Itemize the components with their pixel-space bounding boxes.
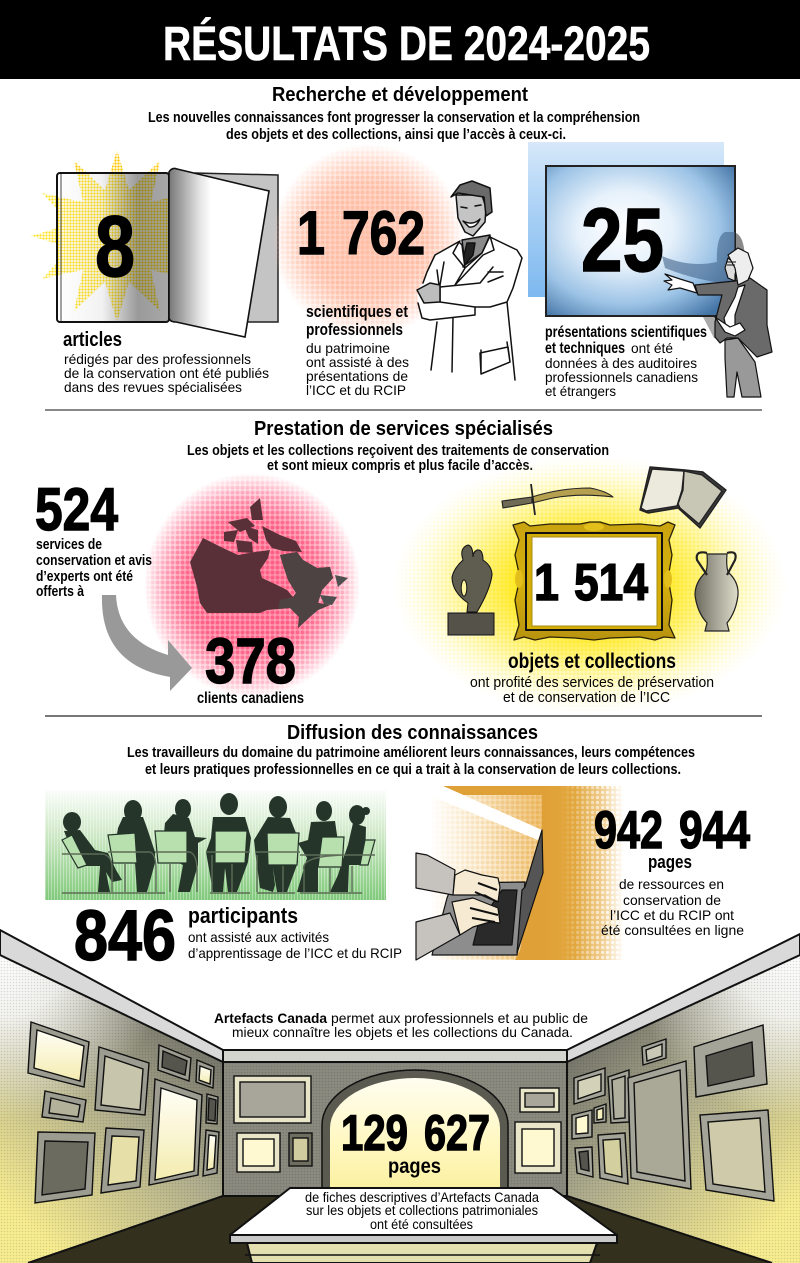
orange light background [428, 786, 626, 960]
title banner: RÉSULTATS DE 2024-2025 [163, 17, 650, 71]
label: scientifiques: l’ICC et du RCIP [306, 382, 406, 398]
icon: old book [640, 467, 726, 528]
label: pages en ligne: conservation de [623, 892, 721, 908]
gallery caption: Artefacts Canada [214, 1010, 588, 1040]
label: présentations: ont été [631, 340, 673, 356]
number: 129 627: 129 [341, 1105, 408, 1161]
label: articles: de la conservation ont été publiés [64, 365, 269, 381]
number: 1 514: 1 [534, 554, 559, 612]
label: présentations: présentations scientifiques [545, 324, 707, 341]
left wall [0, 930, 223, 1263]
map of Canada [190, 498, 348, 628]
number: 1 762 [297, 199, 425, 267]
intro text: prestation [187, 443, 609, 474]
number: 129 627 [341, 1105, 490, 1161]
green meeting panel [45, 790, 386, 900]
icon: sculpture [448, 545, 494, 635]
label: articles: articles [63, 329, 122, 351]
label: objets et collections: et de conservation de l’ICC [503, 690, 670, 706]
gallery caption: Artefacts Canada: Artefacts Canada [214, 1010, 327, 1026]
intro text: diffusion: Les travailleurs du domaine du patrimoine améliorent leurs connaissances, leurs compétences [127, 745, 695, 761]
right wall [567, 934, 800, 1263]
label: pages en ligne: l’ICC et du RCIP ont [610, 907, 734, 923]
icon: presenter [664, 248, 772, 397]
section: diffusion des connaissances [45, 722, 750, 976]
back wall [223, 1050, 567, 1196]
label: pages en ligne: pages [648, 852, 692, 872]
number: 942 944 [594, 801, 750, 860]
label: participants: ont assisté aux activités [188, 929, 329, 945]
laptop computer [432, 830, 543, 955]
paintings: back wall [234, 1076, 561, 1173]
label: scientifiques: présentations de [306, 368, 408, 384]
number: 524: 524 [35, 476, 119, 543]
number: 942 944: 944 [679, 801, 750, 860]
label: participants: participants [188, 903, 298, 928]
peach halftone glow [276, 146, 462, 334]
title banner [0, 0, 800, 79]
label: objets et collections: ont profité des services de préservation [470, 675, 714, 691]
number: 378: 378 [205, 625, 296, 697]
label: clients canadiens: clients canadiens [197, 690, 304, 707]
projection screen [528, 142, 745, 340]
label: articles [63, 329, 269, 395]
label: scientifiques: scientifiques et [306, 302, 408, 321]
table text: sur les objets et collections patrimoniales [306, 1203, 538, 1218]
number: 942 944: 942 [594, 801, 663, 860]
label: objets et collections [470, 650, 714, 706]
icon: amphora vase [695, 552, 738, 631]
archway [322, 1070, 508, 1196]
table text: de fiches descriptives d’Artefacts Canada [305, 1190, 539, 1205]
number: 1 514 [534, 554, 648, 612]
intro text: recherche: des objets et des collections, ainsi que l’accès à ceux-ci. [226, 127, 566, 143]
label: scientifiques [306, 302, 409, 398]
number: 8: 8 [95, 199, 135, 295]
label: pages: pages [388, 1155, 441, 1178]
table text [305, 1190, 539, 1232]
label: pages en ligne [601, 852, 744, 938]
star burst behind book [31, 150, 203, 322]
label: présentations: et techniques [545, 340, 625, 357]
paintings: right wall [572, 1025, 774, 1201]
label: services: d’experts ont été [36, 568, 133, 585]
label: présentations: données à des auditoires [545, 355, 697, 371]
hands on keyboard [416, 853, 500, 960]
arrow [102, 595, 192, 691]
label: services: offerts à [36, 583, 85, 600]
label: présentations: et étrangers [545, 383, 616, 399]
intro text: recherche [148, 110, 640, 143]
label: participants: d’apprentissage de l’ICC et du RCIP [188, 945, 402, 961]
floor [0, 1196, 800, 1263]
label: pages en ligne: de ressources en [619, 876, 724, 892]
pink halftone glow [146, 476, 358, 694]
label: pages en ligne: été consultées en ligne [601, 922, 744, 938]
intro text: recherche: Les nouvelles connaissances font progresser la conservation et la compréhension [148, 110, 640, 126]
intro text: diffusion: et leurs pratiques professionnelles en ce qui a trait à la conservation de leurs collections. [145, 762, 681, 778]
label: scientifiques: professionnels [306, 320, 403, 339]
label: objets et collections: objets et collections [508, 650, 676, 673]
heading: prestation: Prestation de services spécialisés [254, 418, 553, 440]
silhouettes: meeting participants [63, 793, 370, 892]
number: 25: 25 [581, 191, 664, 291]
laptop illustration [416, 786, 626, 960]
label: articles: dans des revues spécialisées [64, 379, 242, 395]
gallery room illustration [0, 930, 800, 1263]
number: 846: 846 [74, 897, 176, 976]
label: scientifiques: du patrimoine [306, 340, 390, 356]
number: 1 762: 1 [297, 199, 325, 267]
number: 1 762: 762 [342, 199, 425, 267]
table text: ont été consultées [370, 1217, 473, 1232]
gallery caption: Artefacts Canada: permet aux professionnels et au public de [331, 1010, 588, 1026]
label: scientifiques: ont assisté à des [306, 354, 409, 370]
intro text: prestation: et sont mieux compris et plus facile d’accès. [267, 458, 533, 474]
label: participants [188, 903, 402, 961]
label: présentations [545, 324, 707, 399]
paintings: left wall [28, 1022, 219, 1203]
label: services: conservation et avis [36, 552, 152, 569]
chairs [62, 831, 375, 893]
number: 1 514: 514 [574, 554, 648, 612]
icon: open book [57, 150, 278, 337]
heading: recherche et développement: Recherche et développement [272, 84, 528, 106]
label: services: services de [36, 536, 102, 553]
yellow halftone glow [399, 460, 781, 710]
label: articles: rédigés par des professionnels [64, 351, 251, 367]
gallery caption: Artefacts Canada: mieux connaître les objets et les collections du Canada. [232, 1024, 573, 1040]
intro text: prestation: Les objets et les collections reçoivent des traitements de conservation [187, 443, 609, 459]
table [230, 1188, 617, 1263]
number: 129 627: 627 [424, 1105, 490, 1161]
heading: diffusion: Diffusion des connaissances [287, 722, 538, 744]
section: recherche et développement [31, 84, 772, 399]
section: prestation de services [35, 418, 800, 720]
label: présentations: professionnels canadiens [545, 369, 698, 385]
icon: sword [502, 484, 613, 515]
icon: gold picture frame [513, 522, 675, 640]
intro text: diffusion [127, 745, 695, 778]
label: services [36, 536, 152, 600]
icon: scientist [417, 181, 525, 380]
